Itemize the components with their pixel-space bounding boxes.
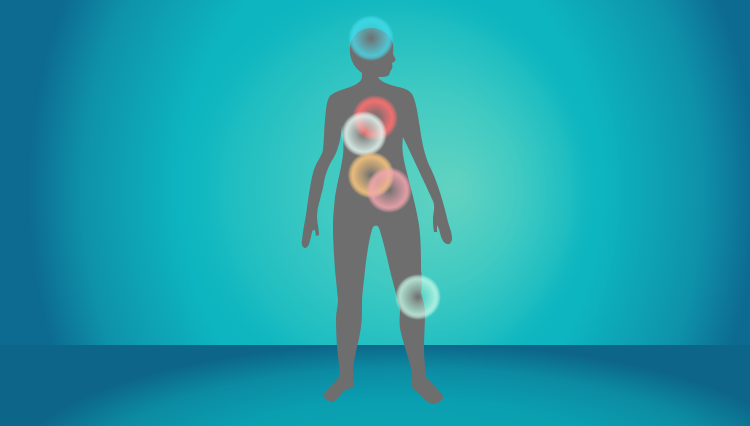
spot: stomach (orange): [348, 152, 394, 198]
spot: brain (cyan): [348, 15, 394, 61]
spot: lung (white): [341, 111, 387, 157]
spot: intestine (pink): [366, 167, 412, 213]
spot: heart (red): [352, 95, 398, 141]
human silhouette: [302, 28, 452, 404]
spot: knee (green): [395, 274, 441, 320]
floor: [0, 345, 750, 426]
